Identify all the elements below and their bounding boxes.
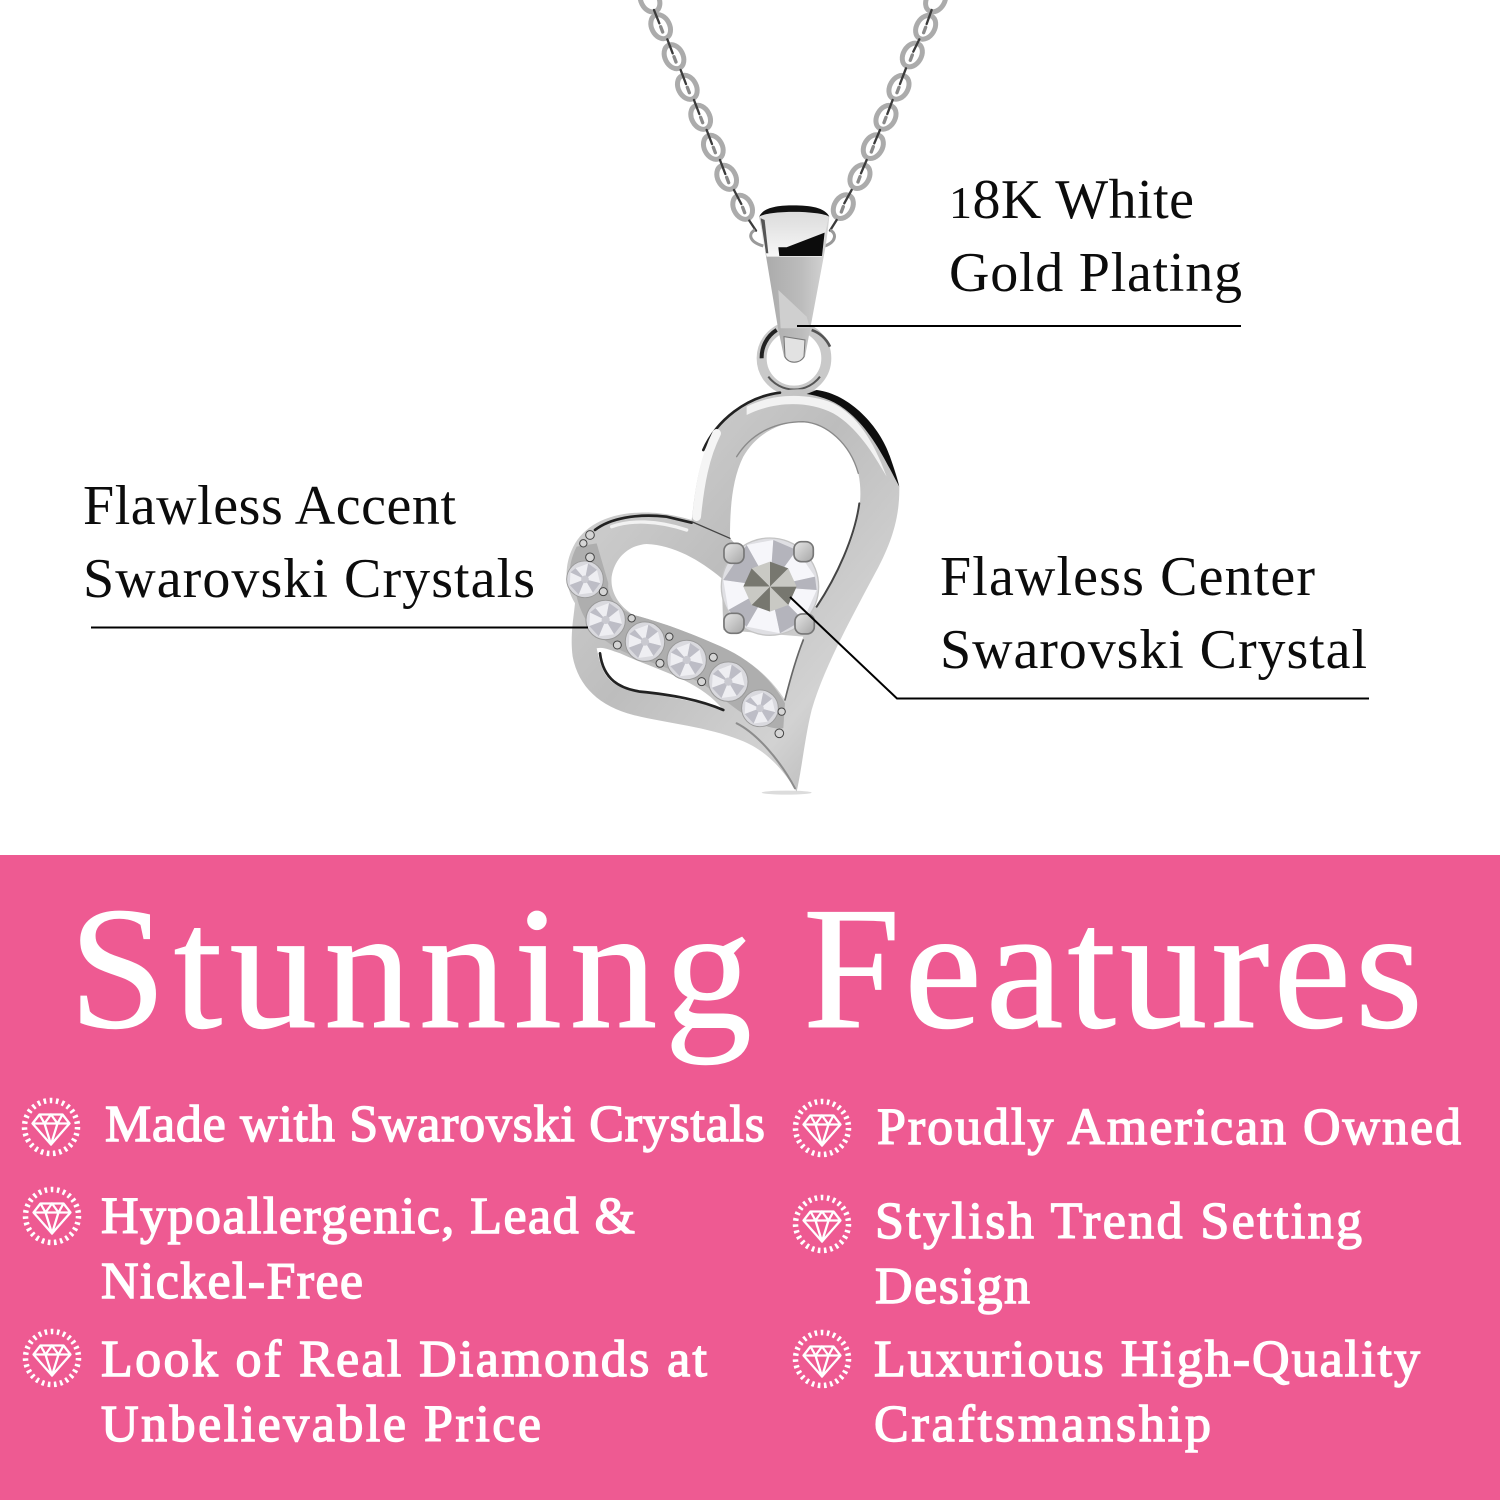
heart metal body <box>567 389 899 792</box>
crystal prongs <box>724 542 814 634</box>
feature: Look of Real Diamonds at Unbelievable Price: Look of Real Diamonds at <box>101 1331 708 1388</box>
label: Flawless Center Swarovski Crystal <box>790 546 1369 698</box>
feature: Luxurious High-Quality Craftsmanship: Luxurious High-Quality <box>874 1331 1420 1388</box>
label: Flawless Center Swarovski Crystal: Swarovski Crystal <box>940 619 1367 681</box>
label: Flawless Accent Swarovski Crystals <box>83 475 588 628</box>
accent crystal band <box>570 543 785 729</box>
feature: Stylish Trend Setting Design: Stylish Trend Setting <box>875 1193 1362 1250</box>
label: Flawless Accent Swarovski Crystals: Flawless Accent <box>83 475 456 537</box>
feature: Made with Swarovski Crystals: Made with Swarovski Crystals <box>105 1096 765 1153</box>
panel: stunning features <box>0 855 1500 1500</box>
title <box>69 871 1423 1065</box>
title: Features <box>803 871 1423 1065</box>
label: Flawless Center Swarovski Crystal: Flawless Center <box>940 546 1315 608</box>
center crystal <box>721 538 819 635</box>
title: Stunning <box>69 871 752 1065</box>
label: 18K White Gold Plating: 18K White <box>949 169 1194 231</box>
label: 18K White Gold Plating: Gold Plating <box>949 242 1242 304</box>
necklace chain <box>636 0 950 246</box>
label: Flawless Accent Swarovski Crystals: Swarovski Crystals <box>83 548 535 610</box>
feature: Luxurious High-Quality Craftsmanship: Craftsmanship <box>874 1396 1211 1453</box>
feature: Proudly American Owned: Proudly American Owned <box>877 1099 1461 1156</box>
metal highlights <box>807 390 899 487</box>
feature: Hypoallergenic, Lead & Nickel-Free: Hypoallergenic, Lead & <box>101 1188 635 1245</box>
feature: Hypoallergenic, Lead & Nickel-Free <box>26 1188 635 1310</box>
feature: Hypoallergenic, Lead & Nickel-Free: Nickel-Free <box>101 1253 363 1310</box>
tip shadow <box>762 791 812 795</box>
heart pendant <box>567 389 899 795</box>
feature: Look of Real Diamonds at Unbelievable Price: Unbelievable Price <box>101 1396 541 1453</box>
accent crystals <box>567 561 778 727</box>
pendant bail and ring <box>759 205 830 391</box>
feature: Stylish Trend Setting Design: Design <box>875 1258 1030 1315</box>
feature: Stylish Trend Setting Design <box>796 1193 1362 1315</box>
label: 18K White Gold Plating <box>797 169 1242 326</box>
feature: Luxurious High-Quality Craftsmanship <box>796 1331 1420 1453</box>
feature: Look of Real Diamonds at Unbelievable Price <box>26 1331 708 1453</box>
